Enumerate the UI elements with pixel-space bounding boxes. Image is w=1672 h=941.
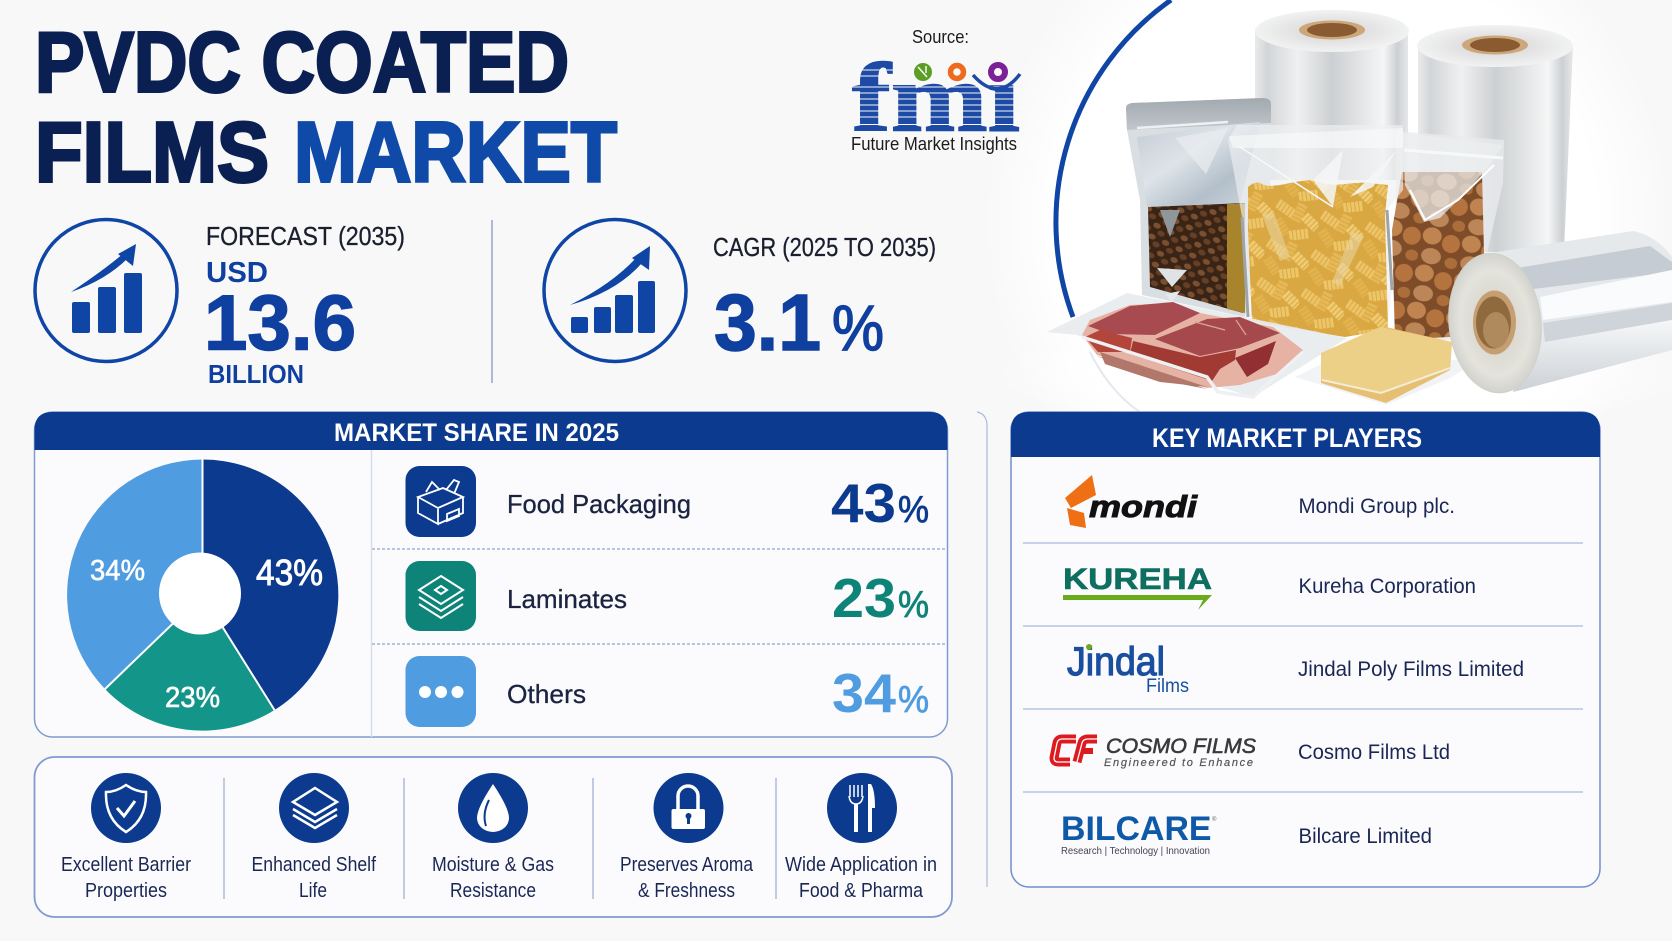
title line 2 dark: FILMS bbox=[35, 106, 269, 200]
benefit text: Excellent Barrier bbox=[61, 854, 191, 876]
icon: drop bbox=[458, 773, 528, 843]
percent: % bbox=[898, 489, 929, 531]
silver pouch bbox=[1126, 98, 1271, 317]
name: Mondi Group plc. bbox=[1298, 495, 1455, 518]
icon: layers bbox=[279, 773, 349, 843]
market share panel bbox=[34, 412, 948, 737]
forecast value: 13.6 bbox=[204, 278, 356, 366]
fmi wordmark: fmi bbox=[852, 44, 1020, 152]
cagr icon bbox=[544, 220, 686, 362]
benefit text: Enhanced Shelf bbox=[252, 854, 376, 876]
icon: layers bbox=[406, 561, 476, 631]
name: Cosmo Films Ltd bbox=[1298, 741, 1450, 764]
cagr percent: % bbox=[832, 292, 884, 364]
panel heading: KEY MARKET PLAYERS bbox=[1152, 423, 1422, 453]
label 34: 34% bbox=[90, 555, 145, 587]
icon: fork and knife bbox=[827, 773, 897, 843]
label: Food Packaging bbox=[507, 489, 691, 519]
icon: lock bbox=[654, 773, 724, 843]
slice 43% bbox=[202, 459, 338, 710]
benefit text: Preserves Aroma bbox=[620, 854, 754, 876]
donut chart bbox=[67, 459, 338, 731]
row: food packaging bbox=[406, 466, 929, 537]
icon: dots bbox=[406, 656, 476, 727]
name: Jindal Poly Films Limited bbox=[1298, 658, 1524, 681]
forecast icon bbox=[35, 220, 177, 362]
cagr text bbox=[713, 232, 936, 367]
key market players panel bbox=[1011, 412, 1600, 887]
blue arc bbox=[1056, 0, 1171, 317]
nuts pouch bbox=[1392, 131, 1504, 340]
player: bilcare bbox=[1061, 810, 1432, 857]
player: kureha bbox=[1063, 563, 1476, 610]
row: others bbox=[406, 656, 929, 727]
benefit: application bbox=[785, 773, 937, 902]
standing film roll 2 bbox=[1417, 25, 1573, 252]
lying film roll bbox=[1442, 231, 1672, 397]
cagr value: 3.1 bbox=[714, 278, 821, 367]
logo: jindal bbox=[1067, 640, 1189, 697]
panel header bbox=[34, 412, 948, 450]
benefit: shelf life: Life bbox=[299, 880, 327, 902]
label: Laminates bbox=[507, 584, 627, 614]
label: Others bbox=[507, 679, 586, 709]
logo: mondi bbox=[1065, 475, 1199, 528]
benefit: moisture bbox=[432, 773, 554, 902]
player: jindal bbox=[1067, 640, 1524, 697]
meat package bbox=[1047, 293, 1347, 397]
cagr label: CAGR (2025 TO 2035) bbox=[713, 232, 936, 262]
currency: USD bbox=[206, 257, 268, 289]
steak right bbox=[1155, 317, 1280, 356]
benefit: moisture: Resistance bbox=[450, 880, 536, 902]
pasta pouch bbox=[1228, 125, 1403, 337]
percent: % bbox=[898, 584, 929, 626]
percent: % bbox=[898, 679, 929, 721]
name: Kureha Corporation bbox=[1298, 575, 1476, 598]
player: mondi bbox=[1065, 475, 1455, 528]
logo: jindal: Films bbox=[1146, 676, 1189, 697]
forecast label: FORECAST (2035) bbox=[206, 221, 405, 251]
benefit: aroma bbox=[620, 773, 754, 902]
logo: cosmo films: Engineered to Enhance bbox=[1104, 757, 1253, 769]
logo: bilcare: ® bbox=[1212, 816, 1217, 823]
title bbox=[35, 16, 617, 200]
forecast text bbox=[204, 221, 405, 389]
benefit: barrier: Properties bbox=[85, 880, 167, 902]
name: Bilcare Limited bbox=[1298, 825, 1432, 848]
cheese block bbox=[1295, 327, 1478, 405]
row: laminates bbox=[406, 561, 929, 631]
slice 34% bbox=[67, 460, 202, 689]
fmi caption: Future Market Insights bbox=[851, 134, 1017, 154]
logo: bilcare: Research | Technology | Innovation bbox=[1061, 845, 1210, 857]
benefit: shelf life bbox=[252, 773, 376, 902]
label 43: 43% bbox=[256, 552, 323, 593]
label 23: 23% bbox=[165, 682, 220, 714]
benefit: barrier bbox=[61, 773, 191, 902]
source logo bbox=[850, 27, 1025, 154]
benefit text: Moisture & Gas bbox=[432, 854, 554, 876]
title line 1: PVDC COATED bbox=[35, 16, 569, 110]
logo: jindal: Jindal bbox=[1067, 640, 1165, 684]
player: cosmo bbox=[1054, 735, 1450, 769]
benefit text: Wide Application in bbox=[785, 854, 937, 876]
benefit: aroma: & Freshness bbox=[638, 880, 735, 902]
icon: food box bbox=[406, 466, 476, 537]
value: 23 bbox=[832, 567, 896, 629]
slice 23% bbox=[105, 595, 274, 731]
source label: Source: bbox=[912, 27, 969, 47]
panel heading: MARKET SHARE IN 2025 bbox=[334, 419, 619, 447]
logo: cosmo films: COSMO FILMS bbox=[1106, 735, 1256, 758]
benefit: application: Food & Pharma bbox=[799, 880, 924, 902]
logo: kureha bbox=[1063, 563, 1212, 610]
logo: mondi: mondi bbox=[1089, 489, 1199, 524]
logo: kureha: KUREHA bbox=[1063, 563, 1212, 596]
title line 2 blue: MARKET bbox=[294, 106, 617, 200]
product photo: films and pouches bbox=[990, 10, 1672, 435]
meat base bbox=[1082, 303, 1303, 388]
logo: bilcare: BILCARE bbox=[1061, 810, 1212, 848]
steak left bbox=[1088, 302, 1200, 335]
icon: shield bbox=[91, 773, 161, 843]
panel header bbox=[1011, 412, 1600, 457]
value: 43 bbox=[831, 472, 896, 534]
standing film roll 1 bbox=[1255, 10, 1409, 180]
benefits panel bbox=[34, 757, 952, 917]
unit: BILLION bbox=[208, 359, 304, 389]
value: 34 bbox=[832, 662, 896, 724]
logo: cosmo films bbox=[1054, 735, 1256, 769]
